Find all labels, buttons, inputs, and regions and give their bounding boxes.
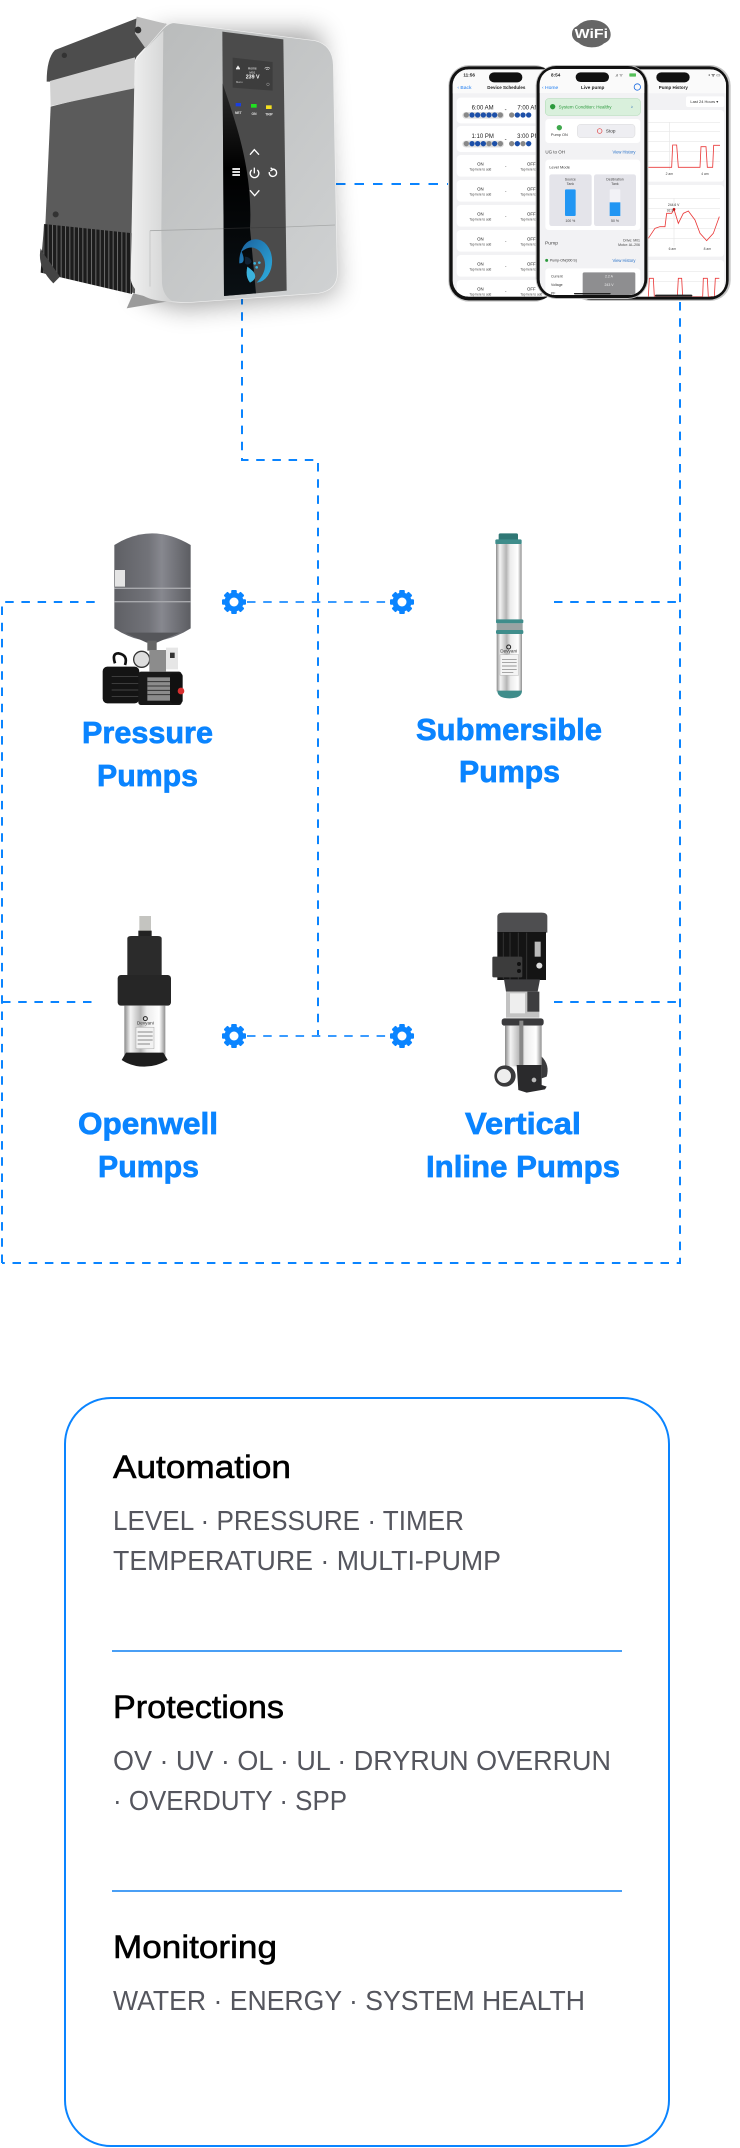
icon: wifi cloud: WiFi (575, 27, 608, 41)
panel: features card (65, 1398, 669, 2146)
pump on and stop: Pump ON (551, 133, 568, 137)
schedule rows: Tap here to add (469, 192, 492, 196)
phone: live pump: 243 V (604, 283, 614, 287)
pump: submersible pump: Devyani (500, 649, 517, 654)
section: monitoring: Monitoring (113, 1929, 277, 1965)
schedule rows: Tap here to add (520, 217, 543, 221)
product: pump controller device (40, 17, 337, 308)
phone: live pump: 8:54 (551, 73, 561, 78)
device control panel: ON (251, 112, 257, 116)
schedule rows: OFF (527, 286, 536, 291)
schedule rows: ON (477, 186, 484, 191)
phone: live pump: Drive: M01 (623, 239, 640, 243)
phone: live pump: .ıl ᯤ (615, 73, 623, 78)
schedule rows: OFF (527, 236, 536, 241)
icon: wifi cloud (572, 20, 611, 47)
phone: live pump: 2.2 A (605, 275, 614, 279)
label: submersible pumps: Pumps (459, 754, 560, 789)
schedule rows: - (505, 189, 507, 194)
tank levels: Level Mode (549, 165, 571, 170)
phone: live pump: View History (612, 258, 636, 263)
tank levels: Destination (606, 178, 624, 182)
schedule rows: OFF (527, 161, 536, 166)
phone: live pump (536, 65, 648, 299)
phone: live pump: Motor: AL-206 (618, 243, 640, 247)
phone: live pump: Voltage (551, 283, 563, 287)
label: openwell pumps (78, 1106, 218, 1184)
schedule rows: Tap here to add (469, 267, 492, 271)
device control panel: 239 V (246, 75, 260, 81)
label: vertical inline pumps (426, 1106, 620, 1184)
status banner: › (631, 105, 633, 111)
section: automation: TEMPERATURE · MULTI-PUMP (113, 1545, 501, 1576)
schedule rows: - (505, 289, 507, 294)
schedule rows: OFF (527, 211, 536, 216)
schedule rows: Tap here to add (520, 267, 543, 271)
label: openwell pumps: Openwell (78, 1106, 218, 1141)
phone: live pump: View History (612, 149, 636, 154)
tank levels: Tank (611, 182, 619, 186)
label: vertical inline pumps: Inline Pumps (426, 1149, 620, 1184)
device control panel: Home (248, 66, 257, 70)
schedule rows: OFF (527, 261, 536, 266)
section: protections: OV · UV · OL · UL · DRYRUN OVERRUN (113, 1745, 611, 1776)
pump: vertical inline pump (492, 913, 548, 1093)
device control panel: TRIP (265, 113, 274, 117)
tank levels: Source (565, 178, 576, 182)
pump: openwell pump (118, 916, 171, 1067)
schedule rows: ON (477, 236, 484, 241)
schedule rows: - (505, 239, 507, 244)
schedule rows: ON (477, 286, 484, 291)
pump: pressure pump (103, 533, 191, 705)
section: protections (113, 1689, 611, 1816)
schedule rows: Tap here to add (469, 217, 492, 221)
status banner: System Condition: Healthy (559, 104, 612, 109)
tank levels: 100 % (565, 219, 575, 223)
phone: pump history: ▪ ᯤ ▭ (708, 73, 720, 78)
device control panel: M01 (249, 70, 256, 74)
section: monitoring (113, 1929, 585, 2016)
phone: pump history: 8 am (704, 247, 711, 251)
schedule rows: Tap here to add (520, 192, 543, 196)
section: protections: · OVERDUTY · SPP (113, 1785, 347, 1816)
phone: pump history (570, 65, 731, 303)
pump: submersible pump (495, 533, 523, 698)
phone: live pump: Live pump (581, 85, 604, 90)
tank levels: 50 % (611, 219, 619, 223)
phone: pump history: 2 am (666, 172, 673, 176)
phone: pump history: 6 am (669, 247, 676, 251)
section: protections: Protections (113, 1689, 284, 1725)
phone: device schedules: ‹ Back (457, 85, 472, 91)
phone: pump history: Pump History (659, 85, 688, 90)
schedule rows: ON (477, 211, 484, 216)
schedule rows: 6:00 AM (472, 105, 494, 111)
tank levels: Tank (567, 182, 574, 186)
device front shell (131, 23, 337, 303)
tank levels (545, 160, 640, 230)
device back housing (40, 17, 167, 308)
phone: live pump: Pump (545, 241, 558, 247)
schedule rows: - (505, 214, 507, 219)
device logo (239, 239, 272, 283)
schedule rows: Tap here to add (469, 292, 492, 296)
pump on and stop: Stop (606, 129, 616, 134)
schedule rows: Tap here to add (520, 167, 543, 171)
schedule rows: ON (477, 161, 484, 166)
gear icons (222, 590, 414, 1048)
section: automation: Automation (113, 1449, 291, 1485)
device control panel (222, 32, 287, 296)
label: submersible pumps (416, 712, 602, 789)
status banner (545, 99, 640, 115)
phone: device schedules: 11:56 (463, 73, 475, 78)
phone: device schedules (448, 65, 548, 302)
phone: pump history: 4 am (701, 172, 709, 176)
label: pressure pumps (82, 715, 213, 793)
phones: mobile app screens (448, 65, 731, 303)
section: monitoring: WATER · ENERGY · SYSTEM HEALTH (113, 1985, 585, 2016)
phone: live pump: UG to OH (545, 149, 565, 154)
schedule rows: - (505, 164, 507, 169)
phone: pump history: Last 24 Hours ▾ (690, 99, 718, 104)
schedule rows: Tap here to add (469, 167, 492, 171)
schedule rows: Tap here to add (520, 242, 543, 246)
section: automation: LEVEL · PRESSURE · TIMER (113, 1505, 464, 1536)
schedule rows: OFF (527, 186, 536, 191)
phone: live pump: Current (551, 275, 563, 279)
phone: device schedules: Device Schedules (487, 85, 526, 90)
phone: live pump: Pump-ON(300 S) (550, 259, 577, 263)
label: vertical inline pumps: Vertical (465, 1106, 581, 1141)
schedule rows: Tap here to add (469, 242, 492, 246)
device control panel: Menu (236, 80, 243, 84)
label: openwell pumps: Pumps (98, 1149, 199, 1184)
phone: pump history: 92.9 (667, 209, 673, 213)
device control panel: NET (235, 111, 242, 115)
phone: live pump: ‹ Home (542, 85, 559, 91)
schedule rows: - (505, 264, 507, 269)
schedule rows: 1:10 PM (472, 134, 494, 140)
schedule rows: 3:00 PM (517, 134, 539, 140)
schedule rows: ON (477, 261, 484, 266)
section: automation (113, 1449, 501, 1576)
label: submersible pumps: Submersible (416, 712, 602, 747)
phone: pump history: 244.6 V (668, 203, 680, 207)
schedule rows: Tap here to add (520, 292, 543, 296)
schedule rows: - (505, 108, 507, 114)
phone: live pump: PF (551, 291, 555, 295)
schedule rows: 7:00 AM (517, 105, 539, 111)
schedule rows: - (505, 137, 507, 143)
dashed connector lines (2, 184, 680, 1263)
pump: openwell pump: Devyani (137, 1021, 154, 1026)
label: pressure pumps: Pumps (97, 758, 198, 793)
label: pressure pumps: Pressure (82, 715, 213, 750)
schedule rows (456, 98, 546, 297)
pump on and stop (545, 119, 640, 143)
